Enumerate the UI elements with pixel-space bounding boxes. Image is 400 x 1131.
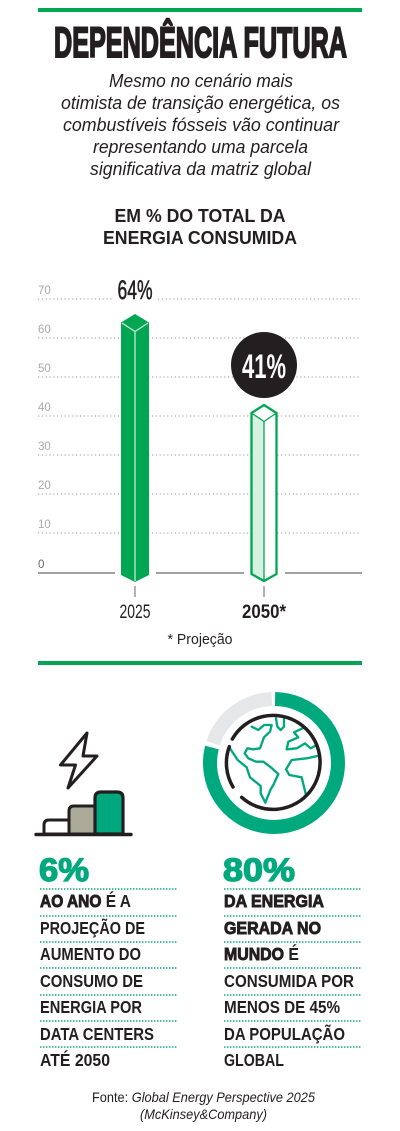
y axis labels: 20 [38,480,51,492]
value: 41% badge [231,332,297,398]
y axis labels: 30 [38,441,51,453]
stat: 80% [223,852,362,1070]
bar: 2025 [121,314,149,582]
icon: lightning and rising bars [36,733,131,834]
source: Fonte: Global Energy Perspective 2025 [92,1089,315,1105]
y axis labels: 0 [38,559,44,571]
intro text: significativa da matriz global [90,159,312,179]
intro text: Mesmo no cenário mais [109,71,293,91]
description: CONSUMO DE [40,971,143,991]
description: GLOBAL [224,1050,284,1070]
description: MENOS DE 45% [224,997,340,1017]
year label: 2025: 2025 [120,602,150,623]
chart heading: EM % DO TOTAL DA [114,205,286,226]
stat: 6% [39,852,178,1070]
description: PROJEÇÃO DE [40,917,145,938]
intro text: representando uma parcela [93,137,308,157]
chart heading: ENERGIA CONSUMIDA [103,227,297,248]
y axis labels: 70 [38,285,51,297]
bar: 2050 [252,405,276,581]
figure: 6% [39,852,89,888]
y axis labels [38,285,51,571]
y axis labels: 50 [38,363,51,375]
source: (McKinsey&Company) [140,1106,267,1122]
value: 64%: 64% [118,275,152,305]
intro text [61,71,340,179]
bar chart [38,275,362,623]
description [40,890,154,1070]
footnote: * Projeção [168,632,232,648]
description: ATÉ 2050 [40,1049,110,1070]
description: AUMENTO DO [40,944,141,964]
description: DA POPULAÇÃO [224,1023,345,1044]
description: MUNDO É [224,943,299,964]
y axis labels: 60 [38,324,51,336]
description: ENERGIA POR [40,997,142,1017]
description: DA ENERGIA [224,891,324,911]
y axis labels: 10 [38,519,51,531]
y axis labels: 40 [38,402,51,414]
figure: 80% [223,852,295,888]
value: 41% badge: 41% [242,348,286,386]
icon: globe with progress ring [210,699,338,827]
intro text: combustíveis fósseis vão continuar [63,115,340,135]
chart heading [103,205,297,248]
description: CONSUMIDA POR [224,971,354,991]
intro text: otimista de transição energética, os [61,93,340,113]
description: GERADA NO [224,918,321,938]
source [92,1089,315,1122]
description [224,891,354,1070]
year label: 2050: 2050* [242,602,287,623]
description: DATA CENTERS [40,1024,154,1044]
description: AO ANO É A [40,890,131,911]
